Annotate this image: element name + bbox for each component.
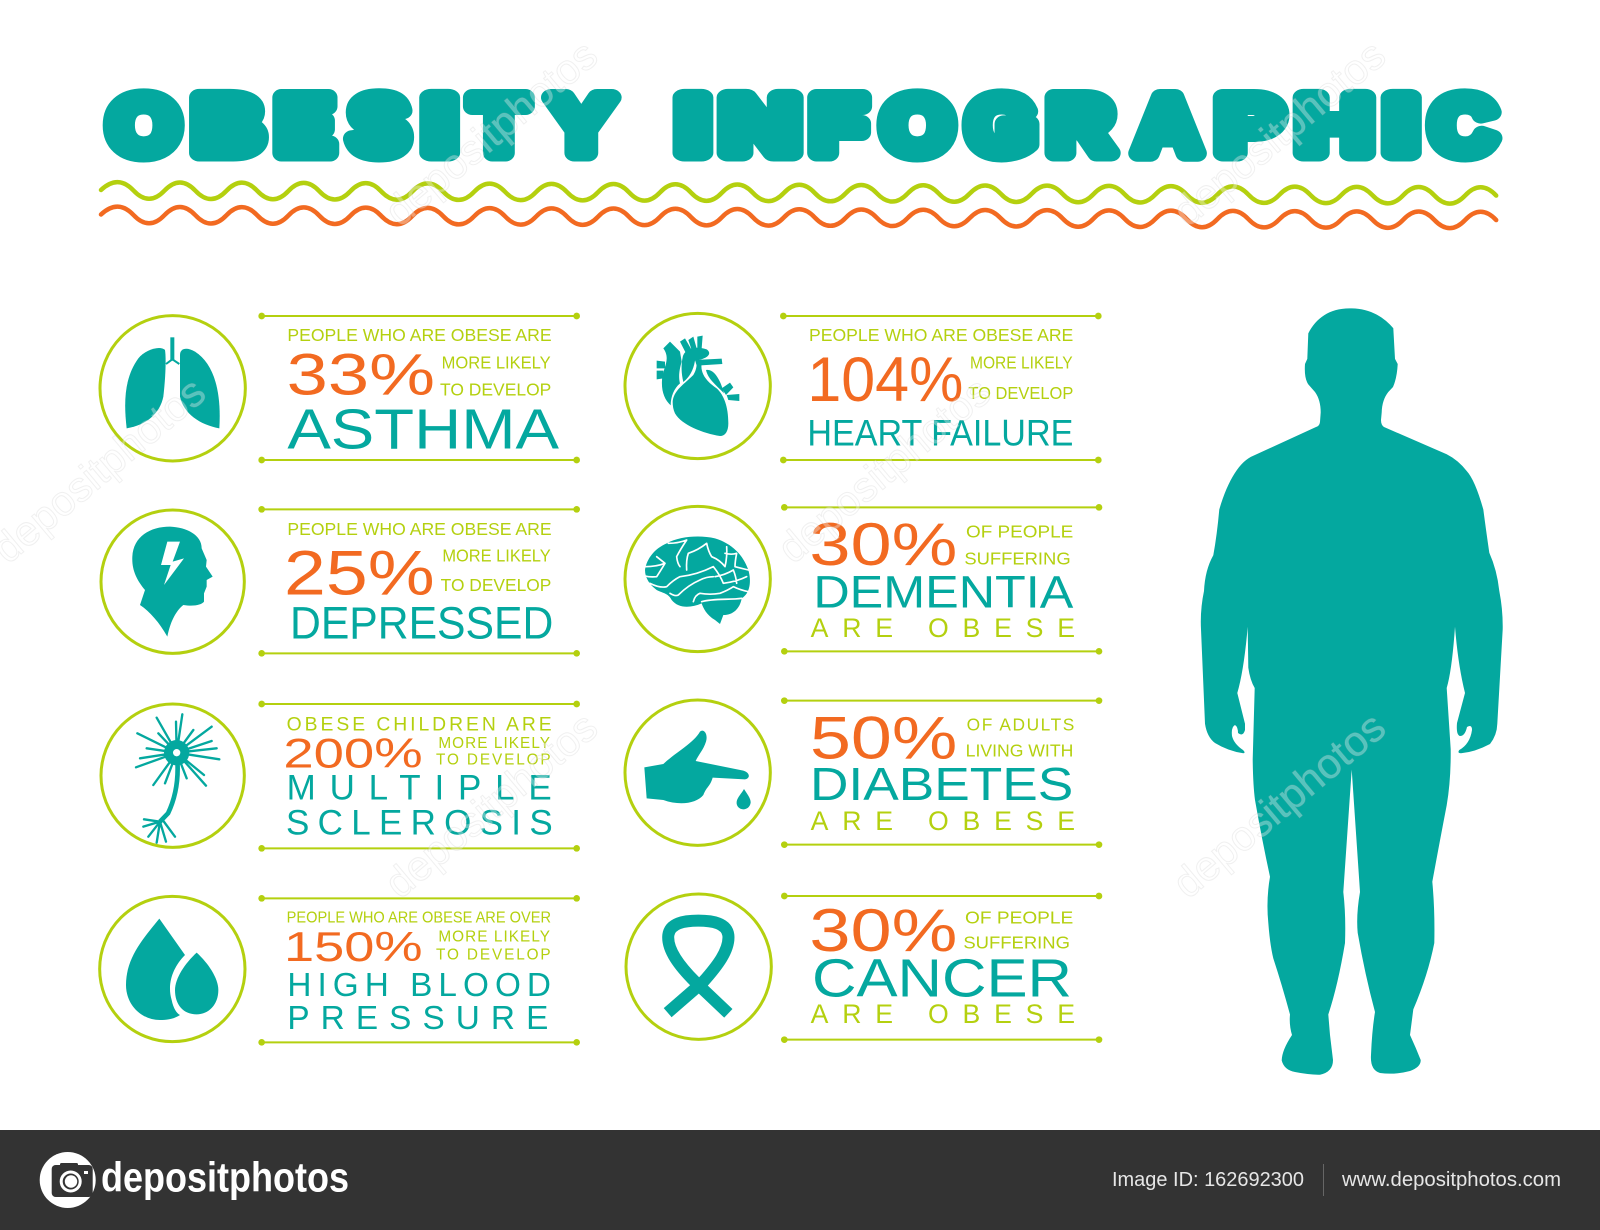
icon: brain bbox=[645, 537, 750, 624]
watermark: depositphotos bbox=[376, 31, 606, 235]
title: A bbox=[1135, 81, 1200, 171]
text: are obese: ARE OBESE bbox=[811, 999, 1075, 1029]
text: more likely: MORE LIKELY bbox=[438, 929, 550, 946]
text: depressed: DEPRESSED bbox=[290, 598, 553, 649]
image id: Image ID: 162692300 bbox=[1112, 1169, 1304, 1191]
text: dementia: DEMENTIA bbox=[813, 567, 1073, 618]
text: intro: PEOPLE WHO ARE OBESE ARE OVER bbox=[287, 910, 551, 927]
panel: cancer bbox=[626, 893, 1102, 1043]
text: suffering: SUFFERING bbox=[964, 548, 1071, 568]
icon: lungs bbox=[125, 337, 220, 428]
text: multiple: MULTIPLE bbox=[287, 768, 552, 807]
text: 150%: 150% bbox=[284, 923, 423, 970]
panel: dementia bbox=[625, 504, 1102, 655]
title: N bbox=[721, 81, 800, 171]
text: of adults: OF ADULTS bbox=[967, 715, 1074, 735]
wavy underline: orange bbox=[101, 207, 1496, 228]
panel: multiple sclerosis bbox=[101, 701, 580, 852]
icon: neuron bbox=[136, 714, 219, 843]
text: are obese: ARE OBESE bbox=[811, 613, 1075, 643]
title: E bbox=[276, 81, 334, 171]
watermark: depositphotos bbox=[769, 368, 999, 572]
text: pressure: PRESSURE bbox=[287, 1000, 548, 1037]
text: intro: PEOPLE WHO ARE OBESE ARE bbox=[809, 325, 1073, 345]
panel: high blood pressure bbox=[100, 895, 580, 1046]
text: high blood: HIGH BLOOD bbox=[287, 967, 551, 1004]
text: intro: PEOPLE WHO ARE OBESE ARE bbox=[287, 325, 552, 345]
text: to develop: TO DEVELOP bbox=[441, 575, 551, 595]
title: H bbox=[1297, 81, 1372, 171]
title: C bbox=[1431, 81, 1496, 171]
figure: obese man silhouette bbox=[1201, 308, 1503, 1075]
watermark: depositphotos bbox=[1164, 31, 1394, 235]
icon: heart bbox=[657, 336, 739, 436]
title: I bbox=[424, 81, 456, 171]
icon: head with lightning bolt bbox=[132, 527, 213, 637]
title: O bbox=[108, 81, 179, 171]
title: B bbox=[193, 81, 263, 171]
title: O bbox=[882, 81, 953, 171]
title: I bbox=[677, 81, 709, 171]
text: cancer: CANCER bbox=[812, 950, 1072, 1009]
text: to develop: TO DEVELOP bbox=[440, 380, 551, 400]
text: suffering: SUFFERING bbox=[963, 932, 1070, 952]
text: sclerosis: SCLEROSIS bbox=[286, 803, 553, 842]
title: G bbox=[967, 81, 1036, 171]
text: of people: OF PEOPLE bbox=[966, 522, 1073, 542]
text: 104%: 104% bbox=[807, 345, 963, 415]
text: more likely: MORE LIKELY bbox=[970, 352, 1073, 372]
watermark: depositphotos bbox=[1164, 703, 1394, 907]
text: to develop: TO DEVELOP bbox=[436, 946, 551, 963]
text: 30%: 30% bbox=[809, 511, 957, 578]
text: 33%: 33% bbox=[287, 342, 435, 407]
title: Y bbox=[549, 81, 613, 171]
text: diabetes: DIABETES bbox=[810, 758, 1073, 810]
title: I bbox=[1385, 81, 1417, 171]
title: S bbox=[350, 81, 408, 171]
text: of people: OF PEOPLE bbox=[965, 907, 1073, 927]
icon: blood drops bbox=[126, 919, 218, 1020]
panel: asthma bbox=[100, 313, 580, 463]
icon: awareness ribbon bbox=[668, 921, 728, 1013]
title: R bbox=[1048, 81, 1113, 171]
title: F bbox=[811, 81, 866, 171]
wavy underline: lime bbox=[101, 182, 1496, 204]
text: 25%: 25% bbox=[284, 538, 435, 608]
logo: wordmark: depositphotos bbox=[101, 1154, 349, 1201]
panel: depressed bbox=[101, 506, 580, 657]
icon: pricked finger with blood drop bbox=[644, 731, 751, 809]
title: P bbox=[1216, 81, 1282, 171]
watermark: depositphotos bbox=[376, 703, 606, 907]
text: intro: PEOPLE WHO ARE OBESE ARE bbox=[287, 519, 552, 539]
text: asthma: ASTHMA bbox=[287, 398, 559, 461]
text: to develop: TO DEVELOP bbox=[436, 751, 551, 768]
watermark bbox=[0, 31, 1394, 907]
logo: camera mark bbox=[40, 1152, 96, 1208]
text: heart failure: HEART FAILURE bbox=[807, 411, 1073, 453]
website url: www.depositphotos.com bbox=[1341, 1169, 1561, 1191]
text: 30%: 30% bbox=[809, 897, 957, 964]
text: to develop: TO DEVELOP bbox=[968, 383, 1073, 403]
text: 200%: 200% bbox=[283, 730, 423, 777]
text: more likely: MORE LIKELY bbox=[442, 352, 551, 372]
footer bar bbox=[0, 1130, 1600, 1230]
panel: diabetes bbox=[625, 697, 1102, 848]
panel: heart failure bbox=[625, 313, 1102, 463]
text: living with: LIVING WITH bbox=[966, 741, 1073, 761]
text: intro: OBESE CHILDREN ARE bbox=[287, 715, 552, 736]
text: more likely: MORE LIKELY bbox=[438, 735, 550, 752]
title: T bbox=[471, 81, 526, 171]
text: are obese: ARE OBESE bbox=[811, 806, 1075, 836]
text: 50%: 50% bbox=[810, 704, 957, 771]
text: more likely: MORE LIKELY bbox=[442, 546, 551, 566]
